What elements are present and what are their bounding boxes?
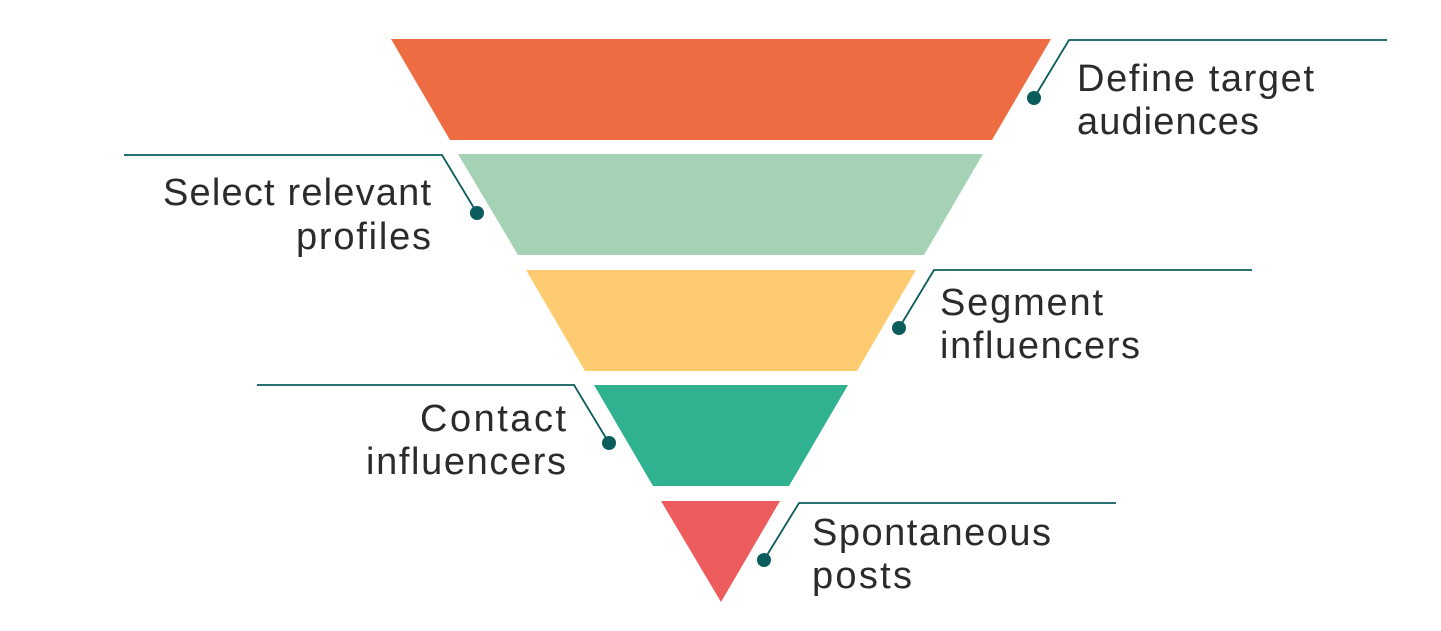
funnel level 4: contact influencers [594, 385, 848, 486]
callout: define target audiences [1027, 40, 1387, 143]
callout: contact influencers: Contact [420, 398, 566, 440]
funnel level 1: define target audiences [391, 39, 1051, 140]
callout: define target audiences: audiences [1077, 101, 1259, 143]
callout: segment influencers: influencers [940, 325, 1140, 367]
funnel level 5: spontaneous posts [661, 501, 780, 602]
callout: define target audiences: Define target [1077, 58, 1314, 100]
callout: contact influencers [257, 385, 616, 483]
callout: spontaneous posts: posts [812, 555, 912, 597]
callout: spontaneous posts [757, 503, 1116, 597]
callout: select relevant profiles: profiles [296, 216, 431, 258]
callout: spontaneous posts: Spontaneous [812, 512, 1051, 554]
funnel level 3: segment influencers [526, 270, 916, 371]
callout: segment influencers [892, 270, 1252, 367]
callout: segment influencers: Segment [940, 282, 1103, 324]
callout: select relevant profiles: Select relevant [163, 172, 431, 214]
callout: select relevant profiles [124, 155, 484, 258]
callout: contact influencers: influencers [366, 441, 566, 483]
funnel level 2: select relevant profiles [458, 154, 983, 255]
